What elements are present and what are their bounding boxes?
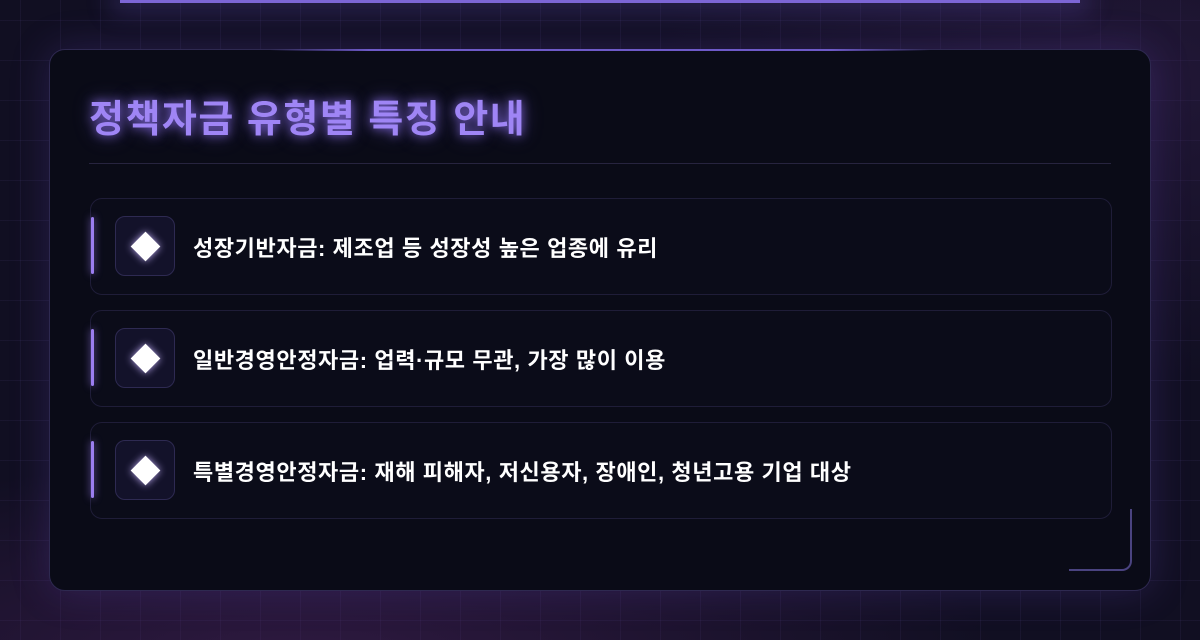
text: item 2: 일반경영안정자금: 업력·규모 무관, 가장 많이 이용 [193, 348, 666, 373]
text: item 3: 특별경영안정자금: 재해 피해자, 저신용자, 장애인, 청년고용 기업 대상 [193, 460, 852, 485]
corner bracket decoration [1069, 509, 1132, 571]
item: 일반경영안정자금 [90, 310, 1112, 407]
title: 정책자금 유형별 특징 안내 [89, 99, 526, 141]
icon: diamond [115, 328, 175, 388]
panel: main card [49, 49, 1151, 591]
icon: diamond [115, 216, 175, 276]
item: 특별경영안정자금 [90, 422, 1112, 519]
icon: diamond [115, 440, 175, 500]
text: item 1: 성장기반자금: 제조업 등 성장성 높은 업종에 유리 [193, 236, 658, 261]
top glow bar [120, 0, 1080, 3]
item: 성장기반자금 [90, 198, 1112, 295]
